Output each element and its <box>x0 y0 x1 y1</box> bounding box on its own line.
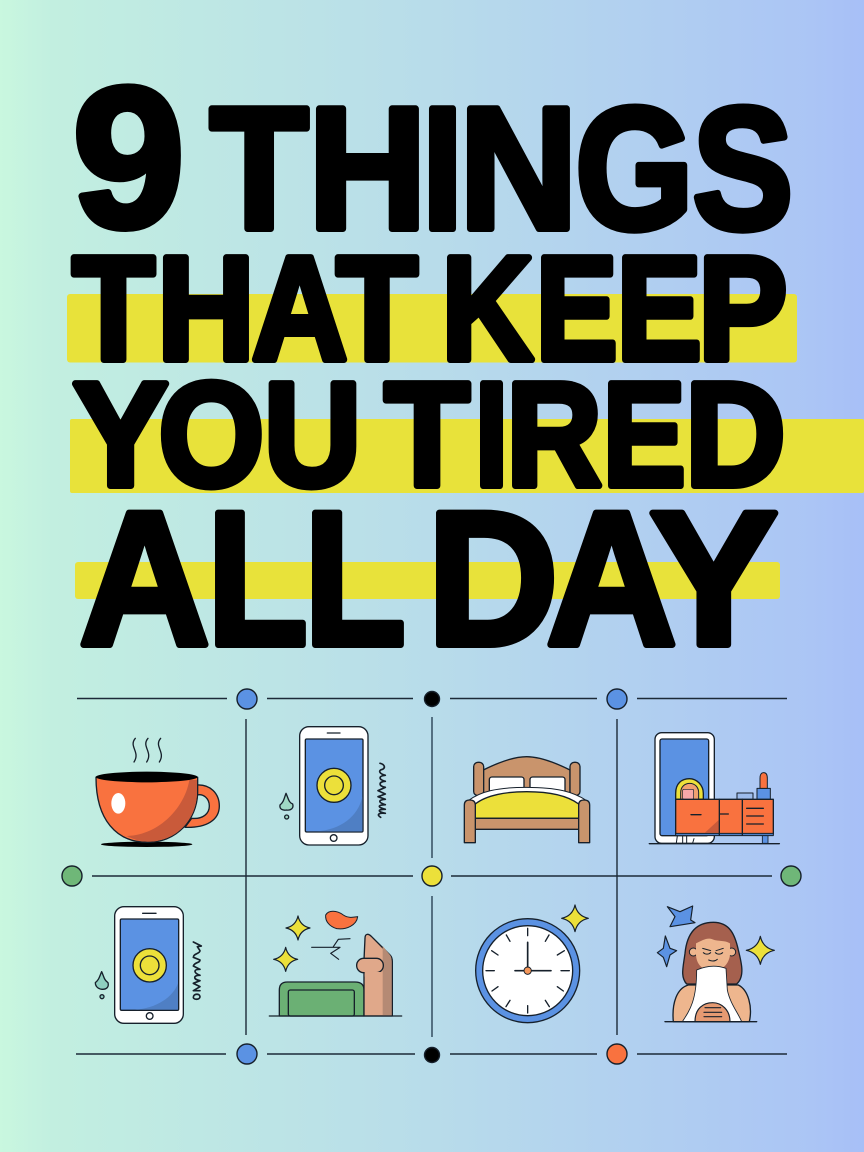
icon: phone 2 <box>95 907 201 1023</box>
title <box>72 45 793 686</box>
title line 4: L <box>304 473 406 686</box>
title line 1: S <box>692 71 793 266</box>
yellow highlight: line 2 <box>67 294 797 362</box>
title line 1: H <box>308 71 427 266</box>
title line 2: E <box>536 226 618 391</box>
title line 3: I <box>475 352 508 517</box>
title line 4: A <box>79 472 210 686</box>
icon: bed <box>464 757 590 843</box>
title line 3: O <box>158 352 264 518</box>
title line 3 <box>73 351 786 518</box>
title line 2: P <box>698 225 787 391</box>
title line 1: T <box>210 71 308 266</box>
title line 4: D <box>427 472 558 685</box>
icon: coffee cup <box>96 738 219 847</box>
icon: tired woman with towel <box>657 906 774 1022</box>
title line 2: A <box>252 226 348 391</box>
title line 3: Y <box>73 351 168 517</box>
icon: phone 1 <box>280 727 385 845</box>
title line 3: R <box>506 352 602 517</box>
title line 1: N <box>459 71 578 266</box>
title line 4: A <box>546 472 677 686</box>
yellow highlight: line 3 <box>70 419 864 493</box>
icon: hand with couch and sparkles <box>269 911 402 1016</box>
title line 1: I <box>422 72 463 266</box>
title line 4: L <box>207 471 308 685</box>
icon: wall clock <box>476 905 588 1023</box>
title line 3: E <box>603 351 686 517</box>
title line 4: Y <box>650 471 778 685</box>
title line 2: E <box>616 227 702 392</box>
title line 2: T <box>72 227 155 392</box>
title line 3: T <box>384 353 470 517</box>
title line 1: 9 <box>72 45 185 269</box>
title line 2 <box>72 225 787 392</box>
yellow highlight: line 4 <box>75 562 780 599</box>
icon: mirror and vanity desk <box>649 733 779 844</box>
title line 3: D <box>685 353 786 517</box>
grid lines and connector dots <box>62 689 801 1064</box>
title line 1 <box>72 45 793 269</box>
title line 2: H <box>157 227 255 392</box>
title line 1: G <box>575 71 694 266</box>
title line 2: K <box>442 226 533 392</box>
title line 2: T <box>336 226 418 391</box>
title line 3: U <box>264 353 361 518</box>
title line 4 <box>79 471 778 686</box>
